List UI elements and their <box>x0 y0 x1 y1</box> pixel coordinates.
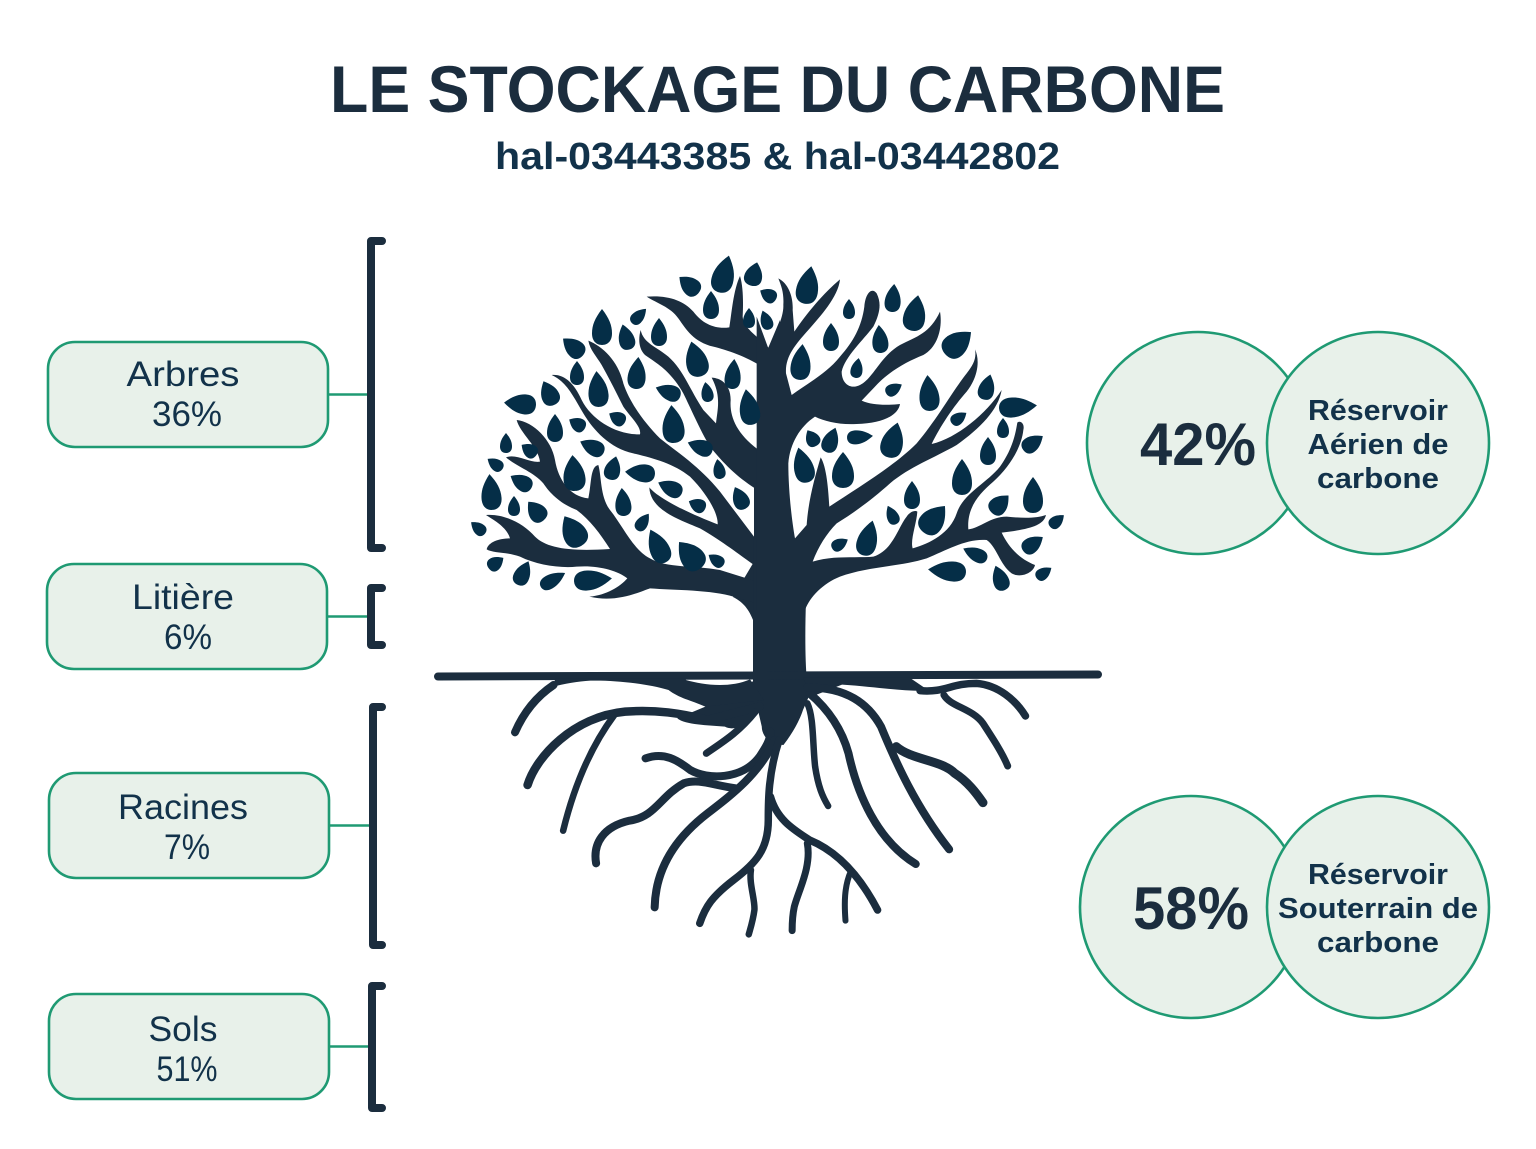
bracket: Sols <box>372 986 382 1108</box>
circle: Réservoir Aérien de carbone: Réservoir <box>1308 395 1448 427</box>
label: Sols 51% <box>148 1010 218 1089</box>
bracket: Litière <box>371 588 382 645</box>
circle: Réservoir Aérien de carbone: Aérien de <box>1308 429 1448 461</box>
label: Arbres 36%: 36% <box>152 395 222 434</box>
ground line <box>438 674 1098 676</box>
label: Litière 6%: 6% <box>164 618 212 657</box>
circle: Réservoir Souterrain de carbone: Souterrain de <box>1278 893 1478 925</box>
panel: réservoir aérien <box>1087 332 1489 554</box>
panel: Sols <box>49 994 370 1099</box>
circle: 42% <box>1087 332 1309 554</box>
label: Sols 51%: Sols <box>148 1010 218 1049</box>
panel: réservoir souterrain <box>1080 796 1489 1018</box>
label: Sols 51%: 51% <box>156 1050 218 1089</box>
subtitle: references: hal-03443385 & hal-03442802 <box>495 136 1060 178</box>
label: Racines 7%: Racines <box>118 788 248 827</box>
label: Arbres 36%: Arbres <box>126 355 240 394</box>
tree trunk <box>733 470 807 682</box>
circle: Réservoir Souterrain de carbone: Réservoir <box>1308 859 1448 891</box>
circle: 58% <box>1080 796 1302 1018</box>
circle: Réservoir Souterrain de carbone <box>1267 796 1489 1018</box>
circle: Réservoir Aérien de carbone: carbone <box>1317 463 1439 495</box>
circle: Réservoir Souterrain de carbone: carbone <box>1317 927 1439 959</box>
label: Litière 6%: Litière <box>132 578 234 617</box>
circle: 58%: 58% <box>1133 875 1249 942</box>
label: Racines 7%: 7% <box>164 828 210 867</box>
panel: Racines <box>49 773 370 878</box>
illustration: tree with roots <box>438 253 1098 934</box>
circle: 42%: 42% <box>1140 411 1256 478</box>
right branches <box>757 278 1046 610</box>
panel: Litière <box>47 564 368 669</box>
leaves <box>467 253 1068 593</box>
roots <box>515 677 1025 934</box>
label: Arbres 36% <box>126 355 240 434</box>
panel: Arbres <box>48 342 368 447</box>
left branches <box>486 276 780 610</box>
bracket: Arbres <box>371 241 382 548</box>
label: Litière 6% <box>132 578 234 657</box>
bracket: Racines <box>373 707 382 945</box>
title: LE STOCKAGE DU CARBONE <box>330 52 1225 126</box>
label: Racines 7% <box>118 788 248 867</box>
circle: Réservoir Aérien de carbone <box>1267 332 1489 554</box>
